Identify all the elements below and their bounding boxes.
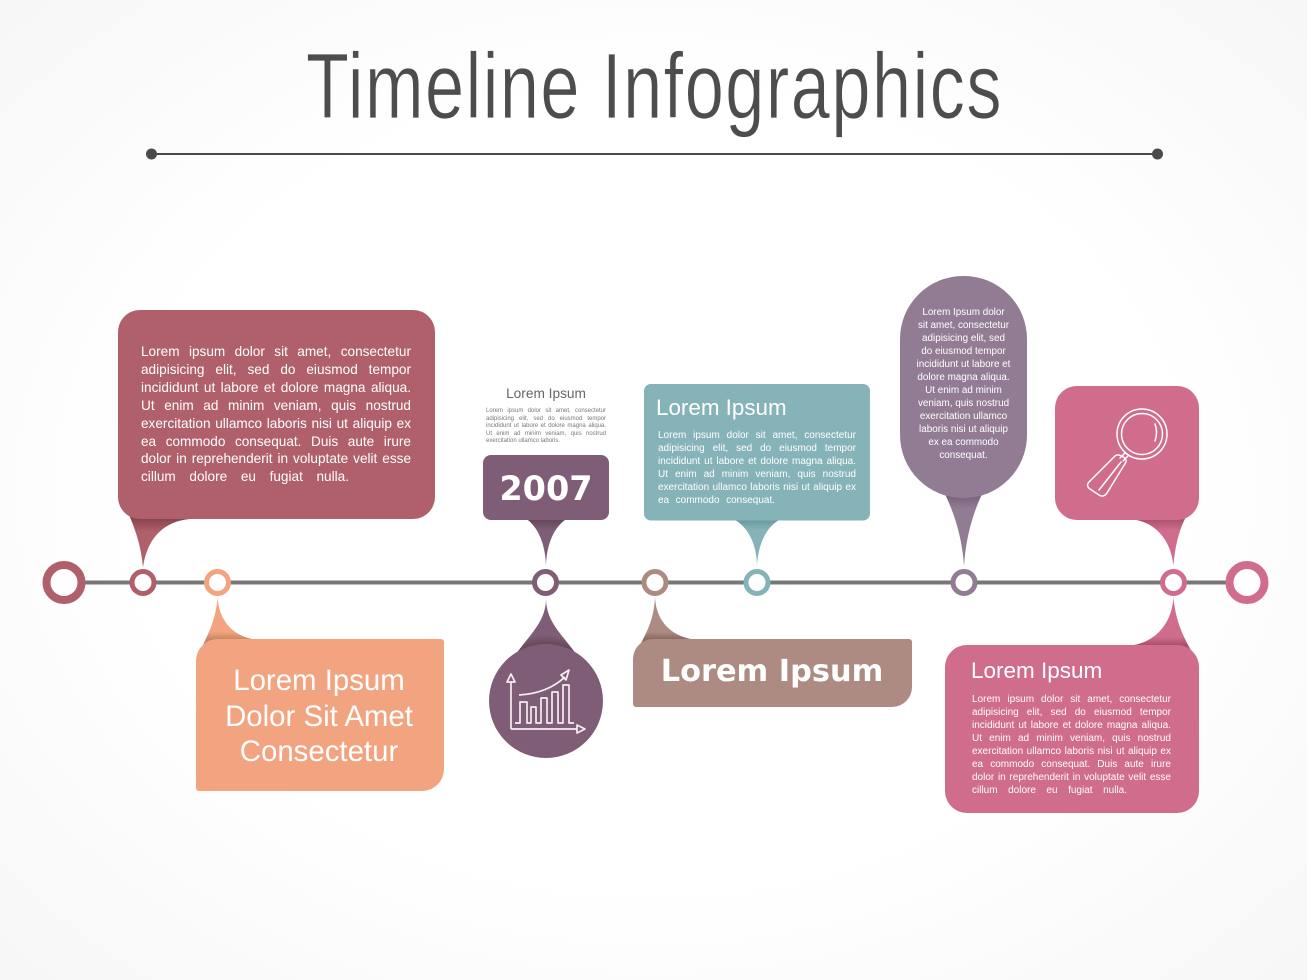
- paragraph: exercitation ullamco laboris nisi ut aliquip ex: [658, 482, 856, 493]
- panel: small text block above year: [486, 386, 606, 444]
- panel: purple rounded callout: Ut enim ad minim: [925, 385, 1002, 396]
- panel: red text callout: Ut enim ad minim veniam, quis nostrud: [141, 398, 411, 413]
- panel: red text callout: adipisicing elit, sed do eiusmod tempor: [141, 362, 411, 377]
- title: Timeline Infographics: [306, 34, 1003, 138]
- paragraph: adipisicing elit, sed do eiusmod tempor: [972, 707, 1171, 718]
- panel: purple rounded callout: exercitation ullamco: [920, 411, 1007, 422]
- paragraph: exercitation ullamco laboris nisi ut aliquip ex: [972, 746, 1171, 757]
- panel: red text callout: cillum dolore eu fugiat nulla.: [141, 469, 349, 484]
- panel: purple rounded callout: sit amet, consectetur: [918, 320, 1009, 331]
- icon: magnifying glass: [1088, 409, 1167, 496]
- small paragraph: Lorem ipsum dolor sit amet, consectetur: [486, 408, 606, 414]
- small paragraph: exercitation ullamco laboris.: [486, 438, 560, 444]
- paragraph: dolor in reprehenderit in voluptate velit esse: [972, 772, 1171, 783]
- panel: orange callout: Dolor Sit Amet: [225, 700, 413, 732]
- panel: year 2007: [483, 455, 609, 568]
- panel: red text callout: dolor in reprehenderit in voluptate velit esse: [141, 451, 411, 466]
- paragraph: Ut enim ad minim veniam, quis nostrud: [658, 469, 856, 480]
- panel: red text callout: exercitation ullamco laboris nisi ut aliquip ex: [141, 416, 411, 431]
- end marker: [1230, 565, 1264, 600]
- panel: teal text callout: [644, 384, 870, 566]
- panel: red text callout: ea commodo consequat. Duis aute irure: [141, 434, 411, 449]
- paragraph: incididunt ut labore et dolore magna aliqua.: [658, 456, 856, 467]
- panel: taupe callout: [633, 598, 912, 707]
- panel: taupe callout: Lorem Ipsum: [661, 654, 883, 689]
- panel: orange callout: Consectetur: [240, 735, 398, 768]
- panel: red text callout: Lorem ipsum dolor sit amet, consectetur: [141, 344, 411, 359]
- start marker: [46, 565, 82, 600]
- panel: purple rounded callout: laboris nisi ut aliquip: [919, 424, 1008, 435]
- paragraph: incididunt ut labore et dolore magna aliqua.: [972, 720, 1171, 731]
- small paragraph: Ut enim ad minim veniam, quis nostrud: [486, 430, 606, 436]
- panel: red text callout: [118, 310, 435, 568]
- small paragraph: adipisicing elit, sed do eiusmod tempor: [486, 416, 606, 422]
- timeline: [42, 561, 1268, 604]
- panel: purple rounded callout: consequat.: [939, 450, 988, 461]
- panel: purple rounded callout: ex ea commodo: [928, 437, 999, 448]
- panel: purple rounded callout: incididunt ut labore et: [917, 359, 1010, 370]
- panel: orange callout: Lorem Ipsum: [233, 664, 405, 697]
- paragraph: [972, 694, 1171, 796]
- panel: year 2007: 2007: [499, 469, 593, 508]
- paragraph: Lorem ipsum dolor sit amet, consectetur: [972, 694, 1171, 705]
- heading: Lorem Ipsum: [971, 658, 1102, 683]
- paragraph: ea commodo consequat. Duis aute irure: [972, 759, 1171, 770]
- panel: chart circle: [489, 599, 603, 758]
- paragraph: Ut enim ad minim veniam, quis nostrud: [972, 733, 1171, 744]
- paragraph: ea commodo consequat.: [658, 495, 775, 506]
- panel: magnifier callout: [1055, 386, 1199, 566]
- paragraph: [658, 430, 856, 506]
- panel: purple rounded callout: Lorem Ipsum dolor: [922, 307, 1005, 318]
- panel: purple rounded callout: adipisicing elit, sed: [922, 333, 1005, 344]
- title rule with end dots: [146, 148, 1163, 160]
- panel: purple rounded callout: dolore magna aliqua.: [917, 372, 1010, 383]
- panel: purple rounded callout: veniam, quis nostrud: [918, 398, 1009, 409]
- panel: red text callout: incididunt ut labore et dolore magna aliqua.: [141, 380, 411, 395]
- panel: pink text callout: [945, 598, 1199, 813]
- small paragraph: incididunt ut labore et dolore magna aliqua.: [486, 423, 606, 429]
- icon: bar chart: [507, 670, 585, 733]
- panel: purple rounded callout: [900, 276, 1027, 566]
- paragraph: adipisicing elit, sed do eiusmod tempor: [658, 443, 856, 454]
- small paragraph: [486, 408, 606, 444]
- panel: orange callout: [196, 598, 444, 791]
- paragraph: Lorem ipsum dolor sit amet, consectetur: [658, 430, 856, 441]
- milestone markers: [132, 572, 1184, 594]
- small heading: Lorem Ipsum: [506, 386, 586, 401]
- heading: Lorem Ipsum: [656, 395, 787, 420]
- panel: purple rounded callout: do eiusmod tempor: [921, 346, 1006, 357]
- paragraph: cillum dolore eu fugiat nulla.: [972, 785, 1127, 796]
